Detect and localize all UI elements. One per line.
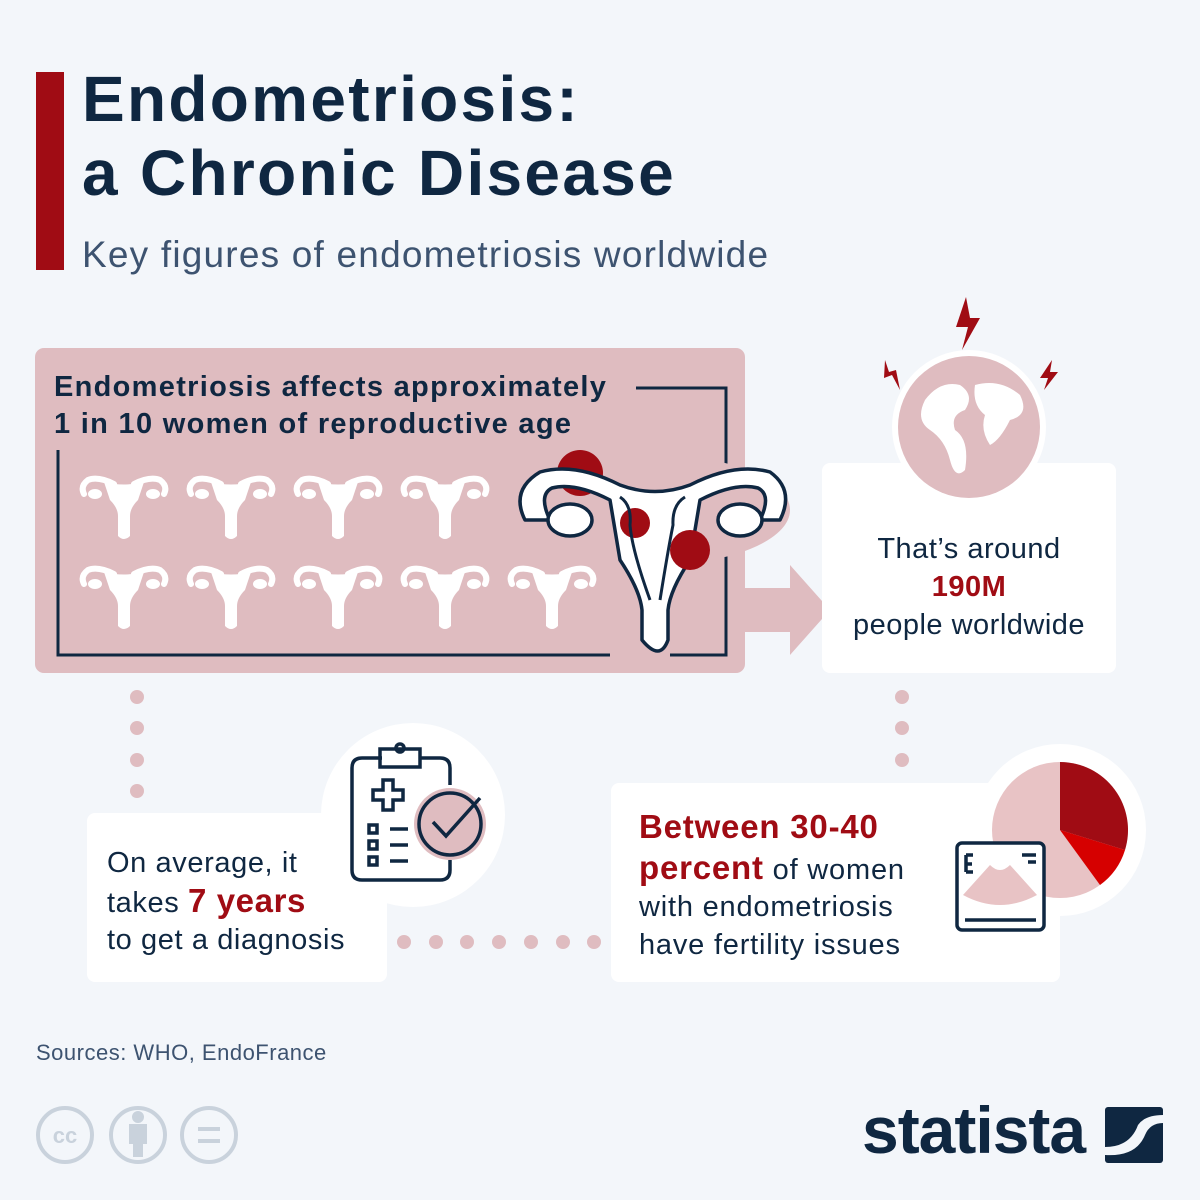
statista logo: statista (862, 1093, 1085, 1167)
text: diagnosis (107, 847, 345, 956)
title: Endometriosis: (82, 63, 580, 135)
arrow (740, 565, 830, 655)
text: fertility: have fertility issues (639, 928, 901, 960)
text: 190M: 190M (932, 571, 1006, 603)
subtitle: Key figures of endometriosis worldwide (82, 234, 769, 275)
panel text: header (54, 371, 607, 440)
title: a Chronic Disease (82, 137, 676, 209)
panel text: header: 1 in 10 women of reproductive age (54, 408, 572, 440)
icon: ultrasound (957, 843, 1044, 930)
icons: 9 uterus (83, 479, 593, 629)
license icons (38, 1108, 236, 1162)
icon: clipboard (352, 744, 486, 880)
text: fertility: with endometriosis (639, 891, 894, 923)
panel text: header: Endometriosis affects approximately (54, 371, 607, 403)
text: 190M: That’s around (877, 533, 1061, 565)
panel: diagnosis (87, 723, 505, 982)
dots: connectors (130, 690, 909, 949)
logo mark (1105, 1107, 1163, 1163)
panel: fertility (611, 744, 1146, 982)
icon: large uterus with lesions (520, 450, 790, 651)
pie chart (992, 762, 1128, 898)
title bar accent (36, 72, 64, 270)
panel: 190M box (822, 297, 1116, 673)
panel: women ratio (35, 348, 790, 673)
icon: globe (884, 297, 1058, 504)
text: fertility (639, 808, 905, 960)
text: fertility: Between 30-40 (639, 808, 879, 845)
text: 190M (853, 533, 1085, 641)
title (82, 63, 676, 209)
sources: Sources: WHO, EndoFrance (36, 1040, 327, 1065)
text: 190M: people worldwide (853, 609, 1085, 641)
text: fertility: percent of women (639, 848, 905, 886)
text: diagnosis: takes 7 years (107, 882, 306, 919)
graphics layer: cc (53, 1123, 77, 1148)
text: diagnosis: to get a diagnosis (107, 924, 345, 956)
text: diagnosis: On average, it (107, 847, 298, 879)
